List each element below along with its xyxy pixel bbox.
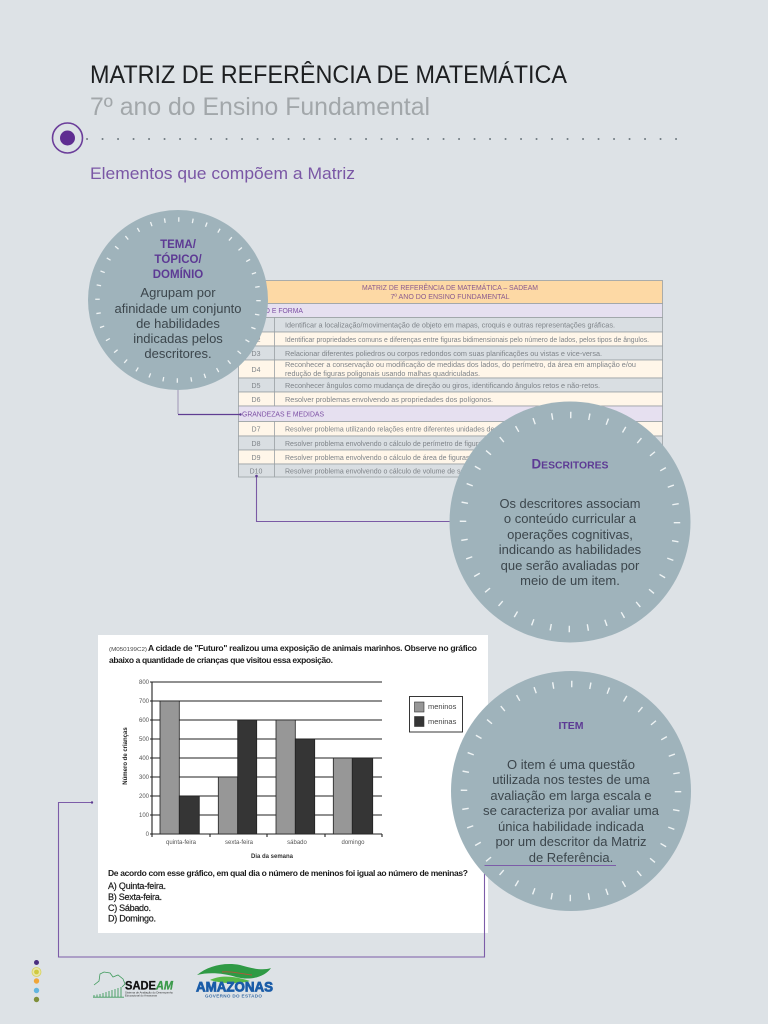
connector: tema to table bbox=[178, 388, 242, 416]
descritores description: o conteúdo curricular a bbox=[504, 511, 637, 526]
y axis labels: 600 bbox=[139, 718, 150, 724]
y axis labels: 700 bbox=[139, 699, 150, 705]
question statement: abaixo a quantidade de crianças que visitou essa exposição. bbox=[109, 655, 333, 665]
question statement bbox=[109, 643, 477, 665]
table rows: D7 to D10: D10 bbox=[250, 468, 263, 476]
table rows: D7 to D10: Resolver problema utilizando relações entre diferentes unidades de medida. bbox=[285, 426, 521, 434]
y axis labels: 800 bbox=[139, 680, 150, 686]
logo: SADEAM bbox=[93, 972, 174, 998]
logo: SADEAM: Sistema de Avaliação do Desempenho bbox=[125, 990, 173, 994]
tema description: Agrupam por bbox=[140, 285, 216, 300]
decorative colour bullets bbox=[32, 960, 41, 1002]
panel: tema circle bbox=[88, 210, 268, 390]
x axis labels: sexta-feira bbox=[225, 840, 254, 846]
panel: item example question bbox=[98, 635, 488, 933]
table rows: D1 to D6: Relacionar diferentes poliedros ou corpos redondos com suas planificações ou vistas e vice-versa. bbox=[285, 351, 602, 358]
icon: section target marker bbox=[52, 123, 82, 153]
x axis labels: quinta-feira bbox=[166, 840, 197, 846]
descritores heading: DESCRITORES bbox=[532, 456, 608, 472]
question and answer options: De acordo com esse gráfico, em qual dia o número de meninos foi igual ao número de meninas? bbox=[108, 868, 468, 878]
tema heading bbox=[153, 239, 203, 281]
legend bbox=[410, 696, 462, 732]
item description: avaliação em larga escala e bbox=[490, 788, 652, 803]
legend: meninos bbox=[428, 702, 457, 711]
tema description: indicadas pelos bbox=[133, 331, 223, 346]
logo: Amazonas: GOVERNO DO ESTADO bbox=[205, 994, 262, 998]
tema description bbox=[114, 285, 242, 361]
section heading: Elementos que compõem a Matriz bbox=[90, 165, 355, 183]
item description: se caracteriza por avaliar uma bbox=[483, 803, 660, 818]
x axis labels: sábado bbox=[287, 840, 308, 846]
question and answer options bbox=[108, 868, 468, 924]
y axis title: Número de crianças bbox=[123, 727, 129, 785]
logo: SADEAM: AM bbox=[155, 978, 174, 992]
tema heading: DOMÍNIO bbox=[153, 268, 203, 281]
subtitle: 7º ano do Ensino Fundamental bbox=[90, 93, 430, 121]
title: MATRIZ DE REFERÊNCIA DE MATEMÁTICA bbox=[90, 60, 567, 89]
y axis labels: 0 bbox=[146, 832, 150, 838]
category: grandezas e medidas bbox=[238, 406, 662, 422]
descritores description: indicando as habilidades bbox=[499, 542, 642, 557]
item description bbox=[483, 757, 660, 865]
y axis labels bbox=[139, 680, 150, 838]
item description: utilizada nos testes de uma bbox=[492, 772, 651, 787]
x axis title: Dia da semana bbox=[251, 854, 294, 860]
tema heading: TEMA/ bbox=[160, 239, 197, 251]
table header: 7º ANO DO ENSINO FUNDAMENTAL bbox=[390, 294, 510, 301]
bars bbox=[160, 701, 373, 834]
table rows: D1 to D6: D4 bbox=[252, 367, 261, 374]
panel: item circle bbox=[451, 671, 691, 911]
question and answer options: A) Quinta-feira. bbox=[108, 881, 166, 891]
logo: SADEAM: SADE bbox=[125, 978, 156, 992]
table rows: D1 to D6: Identificar propriedades comuns e diferenças entre figuras bidimensionais pelo número de lados, pelos tipos de ângulos. bbox=[285, 337, 649, 344]
category: espaço e forma bbox=[238, 304, 662, 318]
table rows: D1 to D6: Resolver problemas envolvendo as propriedades dos polígonos. bbox=[285, 397, 493, 404]
table rows: D1 to D6: Reconhecer a conservação ou modificação de medidas dos lados, do perímetro, da área em ampliação e/ou bbox=[285, 362, 636, 369]
question statement: A cidade de "Futuro" realizou uma exposição de animais marinhos. Observe no gráfico bbox=[148, 643, 477, 653]
item heading: ITEM bbox=[558, 720, 584, 732]
logo: SADEAM: Educacional do Amazonas bbox=[125, 994, 158, 998]
connector: item to question bbox=[58, 801, 616, 957]
table header: MATRIZ DE REFERÊNCIA DE MATEMÁTICA – SADEAM bbox=[362, 283, 538, 292]
table rows: D1 to D6: D5 bbox=[252, 383, 261, 390]
table rows: D7 to D10: D9 bbox=[252, 455, 261, 462]
question statement: (M050199C2) bbox=[109, 647, 147, 653]
y axis labels: 100 bbox=[139, 813, 150, 819]
table rows: D7 to D10: D7 bbox=[252, 426, 261, 434]
question and answer options: C) Sábado. bbox=[108, 903, 151, 913]
logo: Amazonas: AMAZONAS bbox=[196, 980, 273, 994]
table rows: D7 to D10: Resolver problema envolvendo o cálculo de perímetro de figuras planas. bbox=[285, 441, 510, 448]
tema heading: TÓPICO/ bbox=[154, 253, 202, 266]
table rows: D1 to D6: Identificar a localização/movimentação de objeto em mapas, croquis e outras representações gráficas. bbox=[285, 322, 615, 330]
table rows: D1 to D6: Reconhecer ângulos como mudança de direção ou giros, identificando ângulos retos e não-retos. bbox=[285, 383, 600, 390]
connector: descritores to table bbox=[255, 475, 452, 522]
descritores description: meio de um item. bbox=[520, 573, 620, 588]
logo: Amazonas bbox=[196, 964, 273, 998]
tema description: afinidade um conjunto bbox=[114, 301, 242, 316]
table rows: D1 to D6 bbox=[238, 318, 662, 406]
question and answer options: D) Domingo. bbox=[108, 914, 156, 924]
table rows: D7 to D10 bbox=[238, 422, 662, 477]
descritores description bbox=[499, 496, 642, 588]
category: grandezas e medidas: GRANDEZAS E MEDIDAS bbox=[242, 412, 324, 418]
x axis labels bbox=[166, 840, 365, 846]
y axis labels: 400 bbox=[139, 756, 150, 762]
panel: reference matrix table bbox=[238, 280, 662, 477]
descritores description: que serão avaliadas por bbox=[501, 558, 640, 573]
table rows: D1 to D6: D1 bbox=[252, 322, 261, 330]
table header bbox=[238, 280, 662, 304]
y axis labels: 200 bbox=[139, 794, 150, 800]
item description: por um descritor da Matriz bbox=[496, 834, 646, 849]
question and answer options: B) Sexta-feira. bbox=[108, 892, 162, 902]
descritores description: Os descritores associam bbox=[500, 496, 640, 511]
descritores description: operações cognitivas, bbox=[507, 527, 633, 542]
table rows: D1 to D6: D3 bbox=[252, 351, 261, 358]
bar chart bbox=[123, 680, 462, 860]
tema description: descritores. bbox=[144, 346, 212, 361]
item description: única habilidade indicada bbox=[498, 819, 645, 834]
y axis labels: 500 bbox=[139, 737, 150, 743]
table rows: D1 to D6: D2 bbox=[252, 337, 261, 344]
tema description: de habilidades bbox=[136, 316, 220, 331]
y axis labels: 300 bbox=[139, 775, 150, 781]
panel: descritores circle bbox=[450, 402, 690, 642]
table rows: D7 to D10: Resolver problema envolvendo o cálculo de volume de sólidos. bbox=[285, 468, 481, 476]
item description: O item é uma questão bbox=[507, 757, 635, 772]
x axis labels: domingo bbox=[341, 840, 365, 846]
table rows: D1 to D6: redução de figuras poligonais usando malhas quadriculadas. bbox=[285, 371, 480, 378]
table rows: D7 to D10: D8 bbox=[252, 441, 261, 448]
category: espaço e forma: ESPAÇO E FORMA bbox=[242, 308, 303, 315]
item description: de Referência. bbox=[529, 850, 613, 865]
table rows: D7 to D10: Resolver problema envolvendo o cálculo de área de figuras planas. bbox=[285, 455, 494, 462]
table rows: D1 to D6: D6 bbox=[252, 397, 261, 404]
legend: meninas bbox=[428, 717, 457, 726]
